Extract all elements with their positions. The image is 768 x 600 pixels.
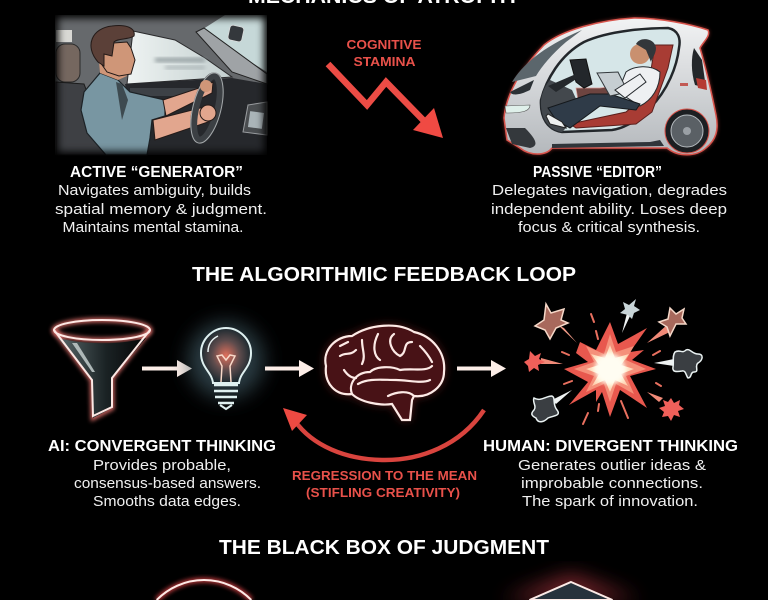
arrow: regression to the mean feedback [283, 408, 484, 460]
text block: active generator: Maintains mental stamina. [62, 219, 244, 236]
label: regression to the mean: REGRESSION TO THE MEAN [292, 469, 477, 483]
label: cognitive stamina: COGNITIVE [346, 38, 422, 52]
passenger [618, 67, 660, 106]
label: cognitive stamina [346, 38, 422, 69]
icon: brain [325, 326, 444, 420]
label: regression to the mean [292, 469, 477, 500]
text block: ai convergent thinking: Smooths data edges. [93, 493, 241, 510]
radiating particle trails [558, 325, 577, 343]
white star top [620, 299, 640, 319]
cabin window [541, 28, 680, 132]
text block: ai convergent thinking: AI: CONVERGENT THINKING [48, 438, 276, 455]
icon: divergent spark explosion [524, 299, 702, 424]
label: regression to the mean: (STIFLING CREATIVITY) [306, 486, 460, 500]
illustration: passive passenger in autonomous pod [504, 18, 717, 155]
wheel [665, 109, 709, 153]
icon: hexagon box partially visible [502, 574, 640, 600]
text block: ai convergent thinking [48, 438, 276, 510]
text block: active generator: Navigates ambiguity, builds [58, 182, 251, 199]
text block: ai convergent thinking: consensus-based answers. [74, 475, 261, 492]
icon: funnel [54, 320, 150, 418]
icon: light bulb [188, 322, 264, 409]
text block: human divergent thinking: improbable connections. [521, 475, 703, 492]
tan star upper left [535, 304, 568, 339]
text block: human divergent thinking: Generates outlier ideas & [518, 457, 706, 474]
arrow: brain to spark [457, 360, 506, 377]
text block: ai convergent thinking: Provides probable, [93, 457, 231, 474]
arrow: bulb to brain [265, 360, 314, 377]
driver [81, 25, 229, 155]
heading: the black box of judgment: THE BLACK BOX OF JUDGMENT [219, 537, 549, 559]
text block: active generator: ACTIVE “GENERATOR” [70, 164, 243, 181]
illustration: man actively driving [55, 15, 267, 155]
label: cognitive stamina: STAMINA [354, 55, 416, 69]
seat [570, 45, 673, 128]
text block: passive editor: independent ability. Loses deep [491, 201, 727, 218]
text block: active generator: spatial memory & judgment. [55, 201, 267, 218]
text block: passive editor [491, 164, 727, 236]
rear light and handle [692, 48, 706, 88]
arrow: declining cognitive stamina [328, 64, 443, 138]
text block: active generator [55, 164, 267, 236]
red burst lower right [659, 398, 684, 421]
red burst left [524, 351, 545, 372]
heading: the algorithmic feedback loop: THE ALGORITHMIC FEEDBACK LOOP [192, 264, 576, 286]
grey splat right [673, 350, 702, 378]
tan star upper right [659, 308, 686, 336]
arrow: funnel to bulb [142, 360, 192, 377]
grey star lower left [532, 396, 558, 422]
text block: human divergent thinking [483, 438, 738, 510]
text block: passive editor: focus & critical synthesis. [518, 219, 700, 236]
icon: circle partially visible [157, 580, 251, 600]
seat [56, 30, 72, 42]
text block: human divergent thinking: HUMAN: DIVERGENT THINKING [483, 438, 738, 455]
text block: human divergent thinking: The spark of innovation. [522, 493, 698, 510]
text block: passive editor: PASSIVE “EDITOR” [533, 164, 662, 181]
text block: passive editor: Delegates navigation, degrades [492, 182, 727, 199]
